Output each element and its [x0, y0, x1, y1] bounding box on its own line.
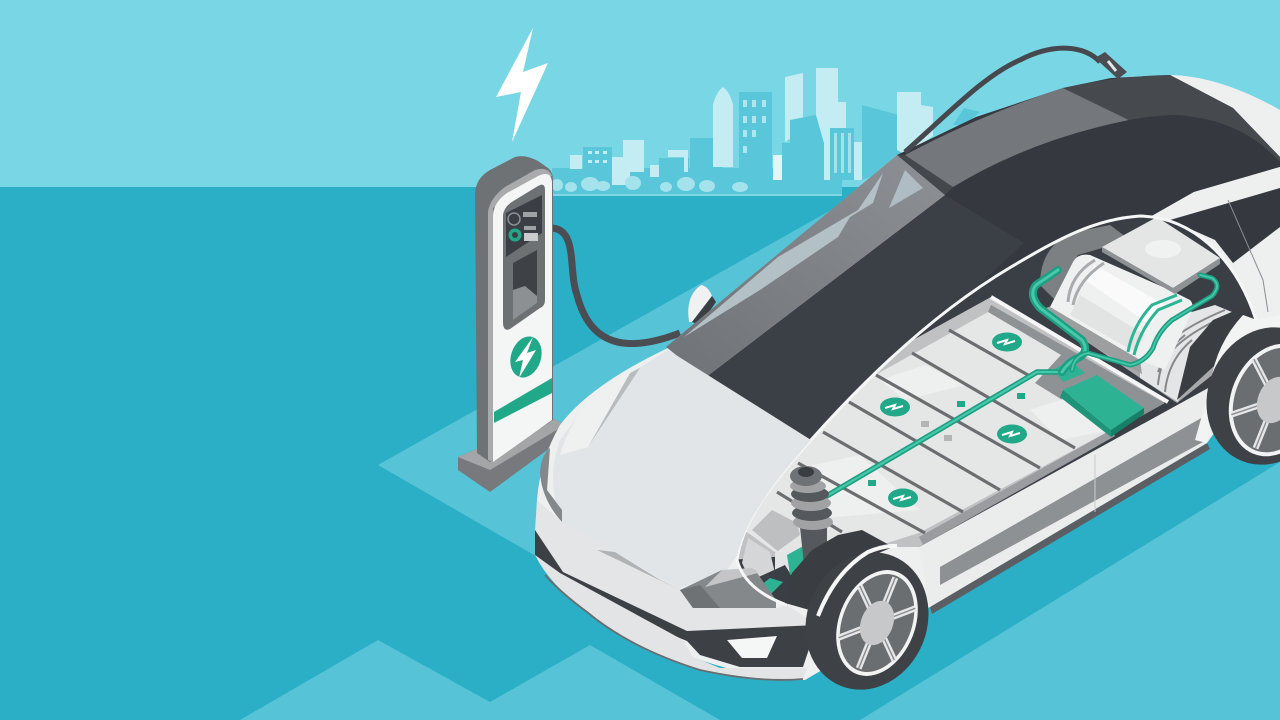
- station stripe: [494, 378, 552, 423]
- motor facets: [1085, 265, 1165, 325]
- cutaway lower outline: [737, 560, 787, 605]
- front compartment: [742, 510, 808, 607]
- a-pillar: [897, 155, 953, 195]
- car body silhouette: [535, 75, 1280, 680]
- station base: [458, 417, 565, 492]
- rear window: [1170, 188, 1280, 263]
- screen icons: [508, 212, 538, 242]
- front fender trim: [818, 546, 897, 616]
- charging station: [458, 156, 565, 492]
- roof cable: [905, 48, 1100, 152]
- rear fender: [1195, 315, 1280, 443]
- left bundle: [1033, 270, 1085, 372]
- roof grey section: [905, 88, 1129, 187]
- headlamp grey area: [680, 568, 776, 608]
- fender highlight: [560, 350, 668, 455]
- windshield small reflection: [889, 170, 923, 208]
- power electronics box: [1053, 360, 1144, 437]
- station screen: [506, 195, 542, 257]
- daytime running light: [727, 636, 777, 658]
- small cell marks: [868, 393, 1025, 486]
- tray bottom rail: [919, 430, 1115, 545]
- main floor cable: [825, 372, 1057, 497]
- front grille: [535, 530, 817, 667]
- station plug slot: [513, 250, 537, 320]
- inverter side: [1102, 247, 1220, 294]
- tray rail: [991, 297, 1168, 402]
- roof and glass base: [705, 75, 1280, 440]
- charging connector: [688, 285, 716, 325]
- interior dark base: [730, 210, 1260, 610]
- rear wheel rim: [1212, 330, 1280, 470]
- motor side shade: [1050, 307, 1142, 374]
- sill panel: [919, 387, 1210, 607]
- inverter box: [1102, 217, 1220, 288]
- suspension strut: [790, 466, 833, 565]
- bumper shadow: [597, 550, 680, 590]
- cutaway outline: [737, 216, 1256, 560]
- battery cells: [746, 312, 1106, 552]
- motor cylinder: [1050, 255, 1192, 370]
- front white panel: [535, 500, 817, 632]
- city skyline: [551, 68, 980, 196]
- hood crease: [588, 368, 640, 447]
- front wheel arch tyre: [785, 530, 893, 613]
- high-voltage cable bundles: [825, 270, 1217, 497]
- motor rear drum: [1140, 305, 1232, 402]
- background: sky: [0, 0, 1280, 188]
- door line: [1228, 200, 1268, 312]
- windshield band: [666, 155, 945, 378]
- front wheel rim: [821, 558, 933, 688]
- front hood: [553, 350, 811, 588]
- front wheel: [785, 534, 949, 708]
- right bundle: [1072, 275, 1217, 370]
- background: ground: [0, 187, 1280, 720]
- rear wheel: [1186, 309, 1280, 483]
- rear window strip: [1150, 167, 1280, 220]
- station side highlight: [488, 169, 552, 462]
- battery tray frame: [730, 297, 1168, 560]
- charging cable to car: [552, 228, 680, 344]
- windshield dark panel: [705, 195, 1024, 440]
- door seam: [1094, 455, 1096, 512]
- station white face: [493, 174, 552, 462]
- car: [535, 75, 1280, 708]
- cutaway interior: [730, 210, 1260, 610]
- sill stripe: [940, 417, 1203, 585]
- floor under motor: [1046, 306, 1214, 403]
- cell separators: [777, 330, 1075, 533]
- lightning bolt: [496, 28, 548, 142]
- drum ribs: [1157, 310, 1228, 392]
- cell highlights: [790, 365, 1111, 520]
- bumper underside shadow: [545, 575, 803, 680]
- motor green bands: [1128, 295, 1182, 355]
- station casing: [475, 156, 553, 462]
- rear hub: [1040, 225, 1130, 300]
- station panel: [503, 185, 545, 330]
- rear wheel well tyre: [1177, 312, 1232, 400]
- motor unit: [1050, 217, 1232, 402]
- parking area: light ground shapes: [240, 205, 1280, 720]
- tray channel: [988, 305, 1165, 433]
- station logo: [505, 332, 547, 382]
- windshield reflection: [684, 173, 883, 337]
- roof top band: [1063, 75, 1280, 162]
- roof cable connector: [1095, 52, 1127, 79]
- motor grey bands: [1068, 260, 1104, 305]
- lower lip: [535, 555, 807, 680]
- battery badges: [880, 332, 1027, 508]
- sill shadow: [930, 443, 1210, 614]
- left grey intake: [540, 448, 562, 522]
